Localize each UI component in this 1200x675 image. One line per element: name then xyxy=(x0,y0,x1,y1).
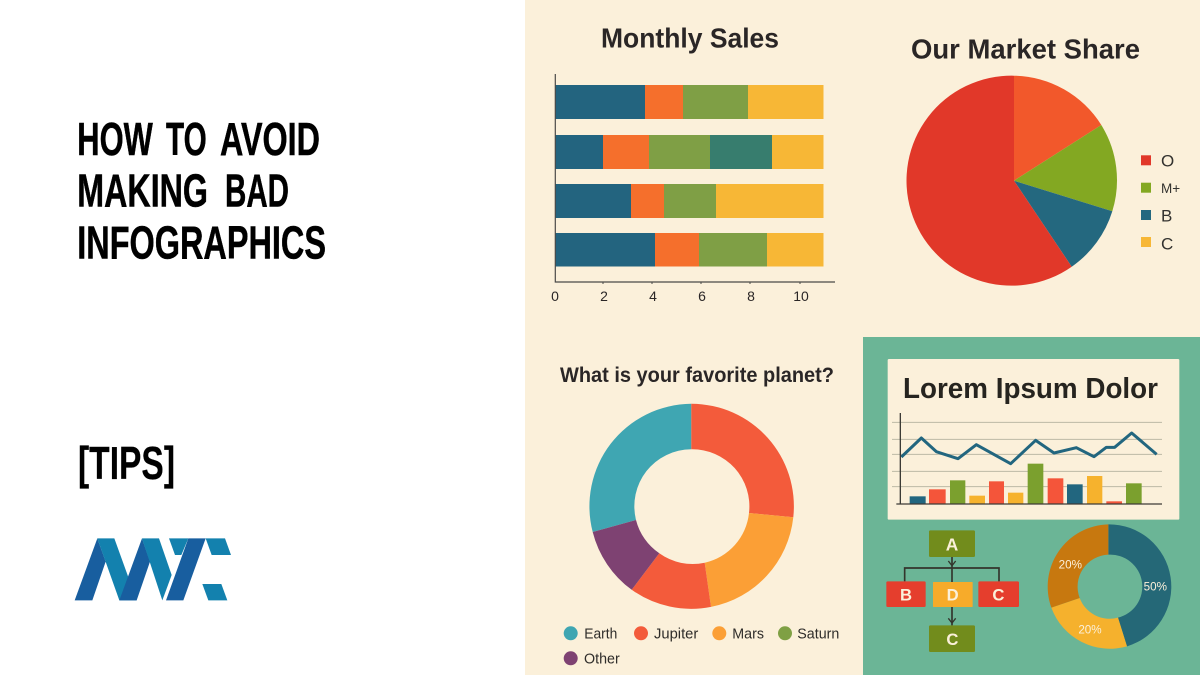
title: AVOID xyxy=(220,113,320,165)
panel: lorem ipsum dashboard xyxy=(863,337,1200,675)
stacked bar chart xyxy=(555,74,835,284)
legend: M+ xyxy=(1161,181,1180,196)
x axis labels xyxy=(551,288,809,304)
x axis labels: 0 xyxy=(551,288,559,304)
chart axes xyxy=(896,413,1162,504)
percentage donut chart: 50% xyxy=(1144,580,1167,593)
legend: C xyxy=(1161,234,1173,253)
heading: favorite planet: What is your favorite planet? xyxy=(560,363,834,387)
left column: title and branding xyxy=(75,113,326,600)
title: MAKING xyxy=(77,165,208,217)
x axis labels: 2 xyxy=(600,288,608,304)
panel: monthly sales xyxy=(525,0,863,337)
icon: MTC logo xyxy=(75,538,231,600)
title: HOW xyxy=(77,113,153,165)
card: combined chart xyxy=(888,359,1179,520)
legend xyxy=(564,626,839,668)
node B: B xyxy=(900,586,912,605)
node D: D xyxy=(947,586,959,605)
panel: market share xyxy=(863,0,1200,337)
legend: O xyxy=(1161,152,1174,170)
legend: Earth xyxy=(584,626,617,643)
heading: market share: Our Market Share xyxy=(911,33,1140,64)
legend: Mars xyxy=(732,626,764,643)
x axis labels: 10 xyxy=(793,288,809,304)
node C right: C xyxy=(992,586,1004,605)
title xyxy=(77,113,326,268)
legend: Jupiter xyxy=(654,626,698,643)
title: BAD xyxy=(225,165,289,217)
percentage donut chart: 20% xyxy=(1059,559,1082,572)
legend xyxy=(1141,152,1180,253)
node C bottom: C xyxy=(946,630,958,649)
flowchart xyxy=(886,530,1019,652)
title: TO xyxy=(166,113,207,165)
legend: Saturn xyxy=(797,626,839,643)
legend: B xyxy=(1161,207,1172,226)
donut chart xyxy=(589,404,794,609)
heading: lorem ipsum dolor: Lorem Ipsum Dolor xyxy=(903,373,1158,405)
heading: monthly sales: Monthly Sales xyxy=(601,23,779,54)
legend: Other xyxy=(584,651,620,668)
bar chart xyxy=(910,464,1142,504)
pie chart xyxy=(907,76,1117,286)
percentage donut chart xyxy=(1048,524,1171,649)
percentage donut chart: 20% xyxy=(1078,624,1102,637)
line chart xyxy=(901,433,1157,464)
x axis labels: 4 xyxy=(649,288,657,304)
x axis labels: 8 xyxy=(747,288,755,304)
x axis labels: 6 xyxy=(698,288,706,304)
title: INFOGRAPHICS xyxy=(77,216,326,268)
panel: favorite planet xyxy=(525,337,863,675)
tips label: [TIPS] xyxy=(78,437,175,489)
node A: A xyxy=(946,534,959,554)
